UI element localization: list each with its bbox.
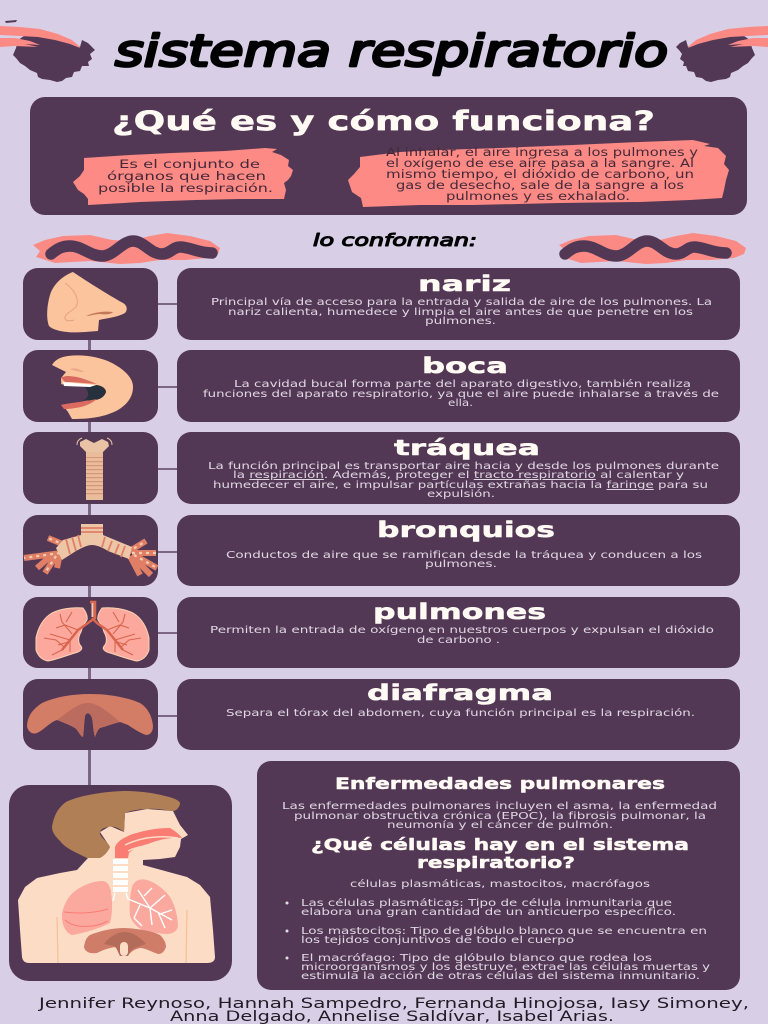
bullets: cell types: Las células plasmáticas: Tipo de célula inmunitaria que (301, 897, 672, 909)
brush callout: definition (73, 148, 293, 205)
panel: diafragma: Separa el tórax del abdomen, cuya función principal es la respiración. (226, 707, 695, 719)
panel: diafragma (177, 679, 740, 750)
panel: tráquea: expulsión. (427, 488, 495, 500)
icon card: trachea (23, 432, 158, 504)
panel: pulmones (177, 597, 740, 668)
authors footer (38, 996, 749, 1024)
text: enfermedades: neumonía y el cáncer de pulmón. (387, 819, 613, 831)
icon: brush stroke top left (0, 20, 95, 82)
panel: nariz: Principal vía de acceso para la entrada y salida de aire de los pulmones. La (211, 296, 712, 308)
brush callout: definition: órganos que hacen (107, 170, 266, 183)
bullets: cell types: El macrófago: Tipo de glóbulo blanco que rodea los (301, 952, 652, 964)
panel: boca: boca (422, 354, 508, 378)
brush callout: how it works (348, 140, 729, 207)
icon: wavy brush left (33, 233, 220, 264)
panel: pulmones: pulmones (373, 600, 546, 624)
heading: enfermedades pulmonares: Enfermedades pulmonares (335, 774, 665, 793)
connector lines (88, 303, 177, 785)
text: enfermedades: pulmonar obstructiva crónica (EPOC), la fibrosis pulmonar, la (294, 810, 706, 822)
bullets: cell types: los tejidos conjuntivos de todo el cuerpo (301, 935, 574, 946)
panel: nariz: pulmones. (425, 316, 496, 327)
bullets: cell types: elabora una gran cantidad de un anticuerpo específico. (301, 906, 676, 918)
brush callout: how it works: mismo tiempo, el dióxido de carbono, un (386, 168, 694, 181)
title: sistema respiratorio (115, 26, 668, 77)
left lung (62, 881, 112, 935)
panel: pulmones: Permiten la entrada de oxígeno en nuestros cuerpos y expulsan el dióxido (210, 624, 714, 636)
panel: bronquios: Conductos de aire que se ramifican desde la tráquea y conducen a los (226, 549, 702, 561)
brush callout: definition: posible la respiración. (98, 182, 273, 195)
icon card: bronchi (23, 515, 158, 586)
airway (115, 828, 182, 858)
brush callout: definition: Es el conjunto de (119, 158, 260, 171)
panel: boca: ella. (448, 398, 473, 409)
panel: pulmones: de carbono . (417, 635, 500, 646)
right lung (130, 879, 178, 934)
bullets: cell types (286, 897, 710, 982)
panel: tráquea: La función principal es transportar aire hacia y desde los pulmones durante (208, 460, 719, 472)
brush callout: how it works: Al inhalar, el aire ingresa a los pulmones y (386, 146, 698, 159)
panel: diafragma: diafragma (367, 681, 553, 705)
panel: bronquios: bronquios (377, 518, 555, 542)
panel: tráquea (177, 432, 740, 504)
bullets: cell types: microorganismos y los destruye, extrae las células muertas y (301, 961, 710, 973)
bullets: cell types: Los mastocitos: Tipo de glóbulo blanco que se encuentra en (301, 925, 707, 937)
panel: bronquios (177, 515, 740, 586)
panel: boca (177, 350, 740, 422)
text: cell list: células plasmáticas, mastocitos, macrófagos (350, 878, 650, 890)
text: enfermedades (282, 801, 717, 831)
icon: brush stroke top right (676, 26, 768, 82)
panel: nariz: nariz (418, 272, 511, 296)
panel: bronquios: pulmones. (425, 559, 497, 570)
panel: tráquea: la respiración . Además, proteger el tracto respiratorio al calentar y (233, 469, 684, 481)
trachea (113, 859, 128, 892)
panel: nariz (177, 268, 740, 340)
heading: what is it: ¿Qué es y cómo funciona? (112, 106, 655, 137)
hair (52, 791, 180, 858)
icon card: mouth (23, 350, 158, 422)
brush callout: how it works: el oxígeno de ese aire pasa a la sangre. Al (386, 157, 694, 170)
body and head (18, 809, 215, 963)
panel: boca: La cavidad bucal forma parte del aparato digestivo, también realiza (234, 378, 691, 390)
panel: boca: funciones del aparato respiratorio, ya que el aire puede inhalarse a través de (203, 388, 719, 400)
panel: what is it and how it works (30, 97, 747, 215)
brush callout: how it works: pulmones y es exhalado. (446, 190, 630, 203)
icon card: lungs (23, 597, 158, 668)
illustration card: human respiratory system (9, 785, 232, 981)
icon card: nose (23, 268, 158, 340)
panel: tráquea: humedecer el aire, e impulsar partículas extrañas hacia la faringe para su (213, 479, 708, 491)
diaphragm (84, 928, 166, 956)
authors footer: Jennifer Reynoso, Hannah Sampedro, Fernanda Hinojosa, Iasy Simoney, (38, 996, 749, 1012)
icon card: diaphragm (23, 679, 158, 750)
text: enfermedades: Las enfermedades pulmonares incluyen el asma, la enfermedad (282, 801, 717, 812)
bullets: cell types: estimula la acción de otras células del sistema inmunitario. (301, 970, 700, 982)
panel: tráquea: tráquea (394, 436, 540, 460)
brush callout: how it works: gas de desecho, sale de la sangre a los (396, 179, 684, 192)
heading: células (311, 835, 689, 872)
panel: nariz: nariz calienta, humedece y limpia el aire antes de que penetre en los (228, 307, 693, 318)
heading: células: respiratorio? (417, 853, 575, 872)
side lines (57, 910, 187, 963)
panel: diseases and cells (257, 761, 740, 990)
icon: wavy brush right (559, 233, 746, 264)
subheading: lo conforman: lo conforman: (313, 231, 477, 251)
heading: células: ¿Qué células hay en el sistema (311, 835, 689, 854)
